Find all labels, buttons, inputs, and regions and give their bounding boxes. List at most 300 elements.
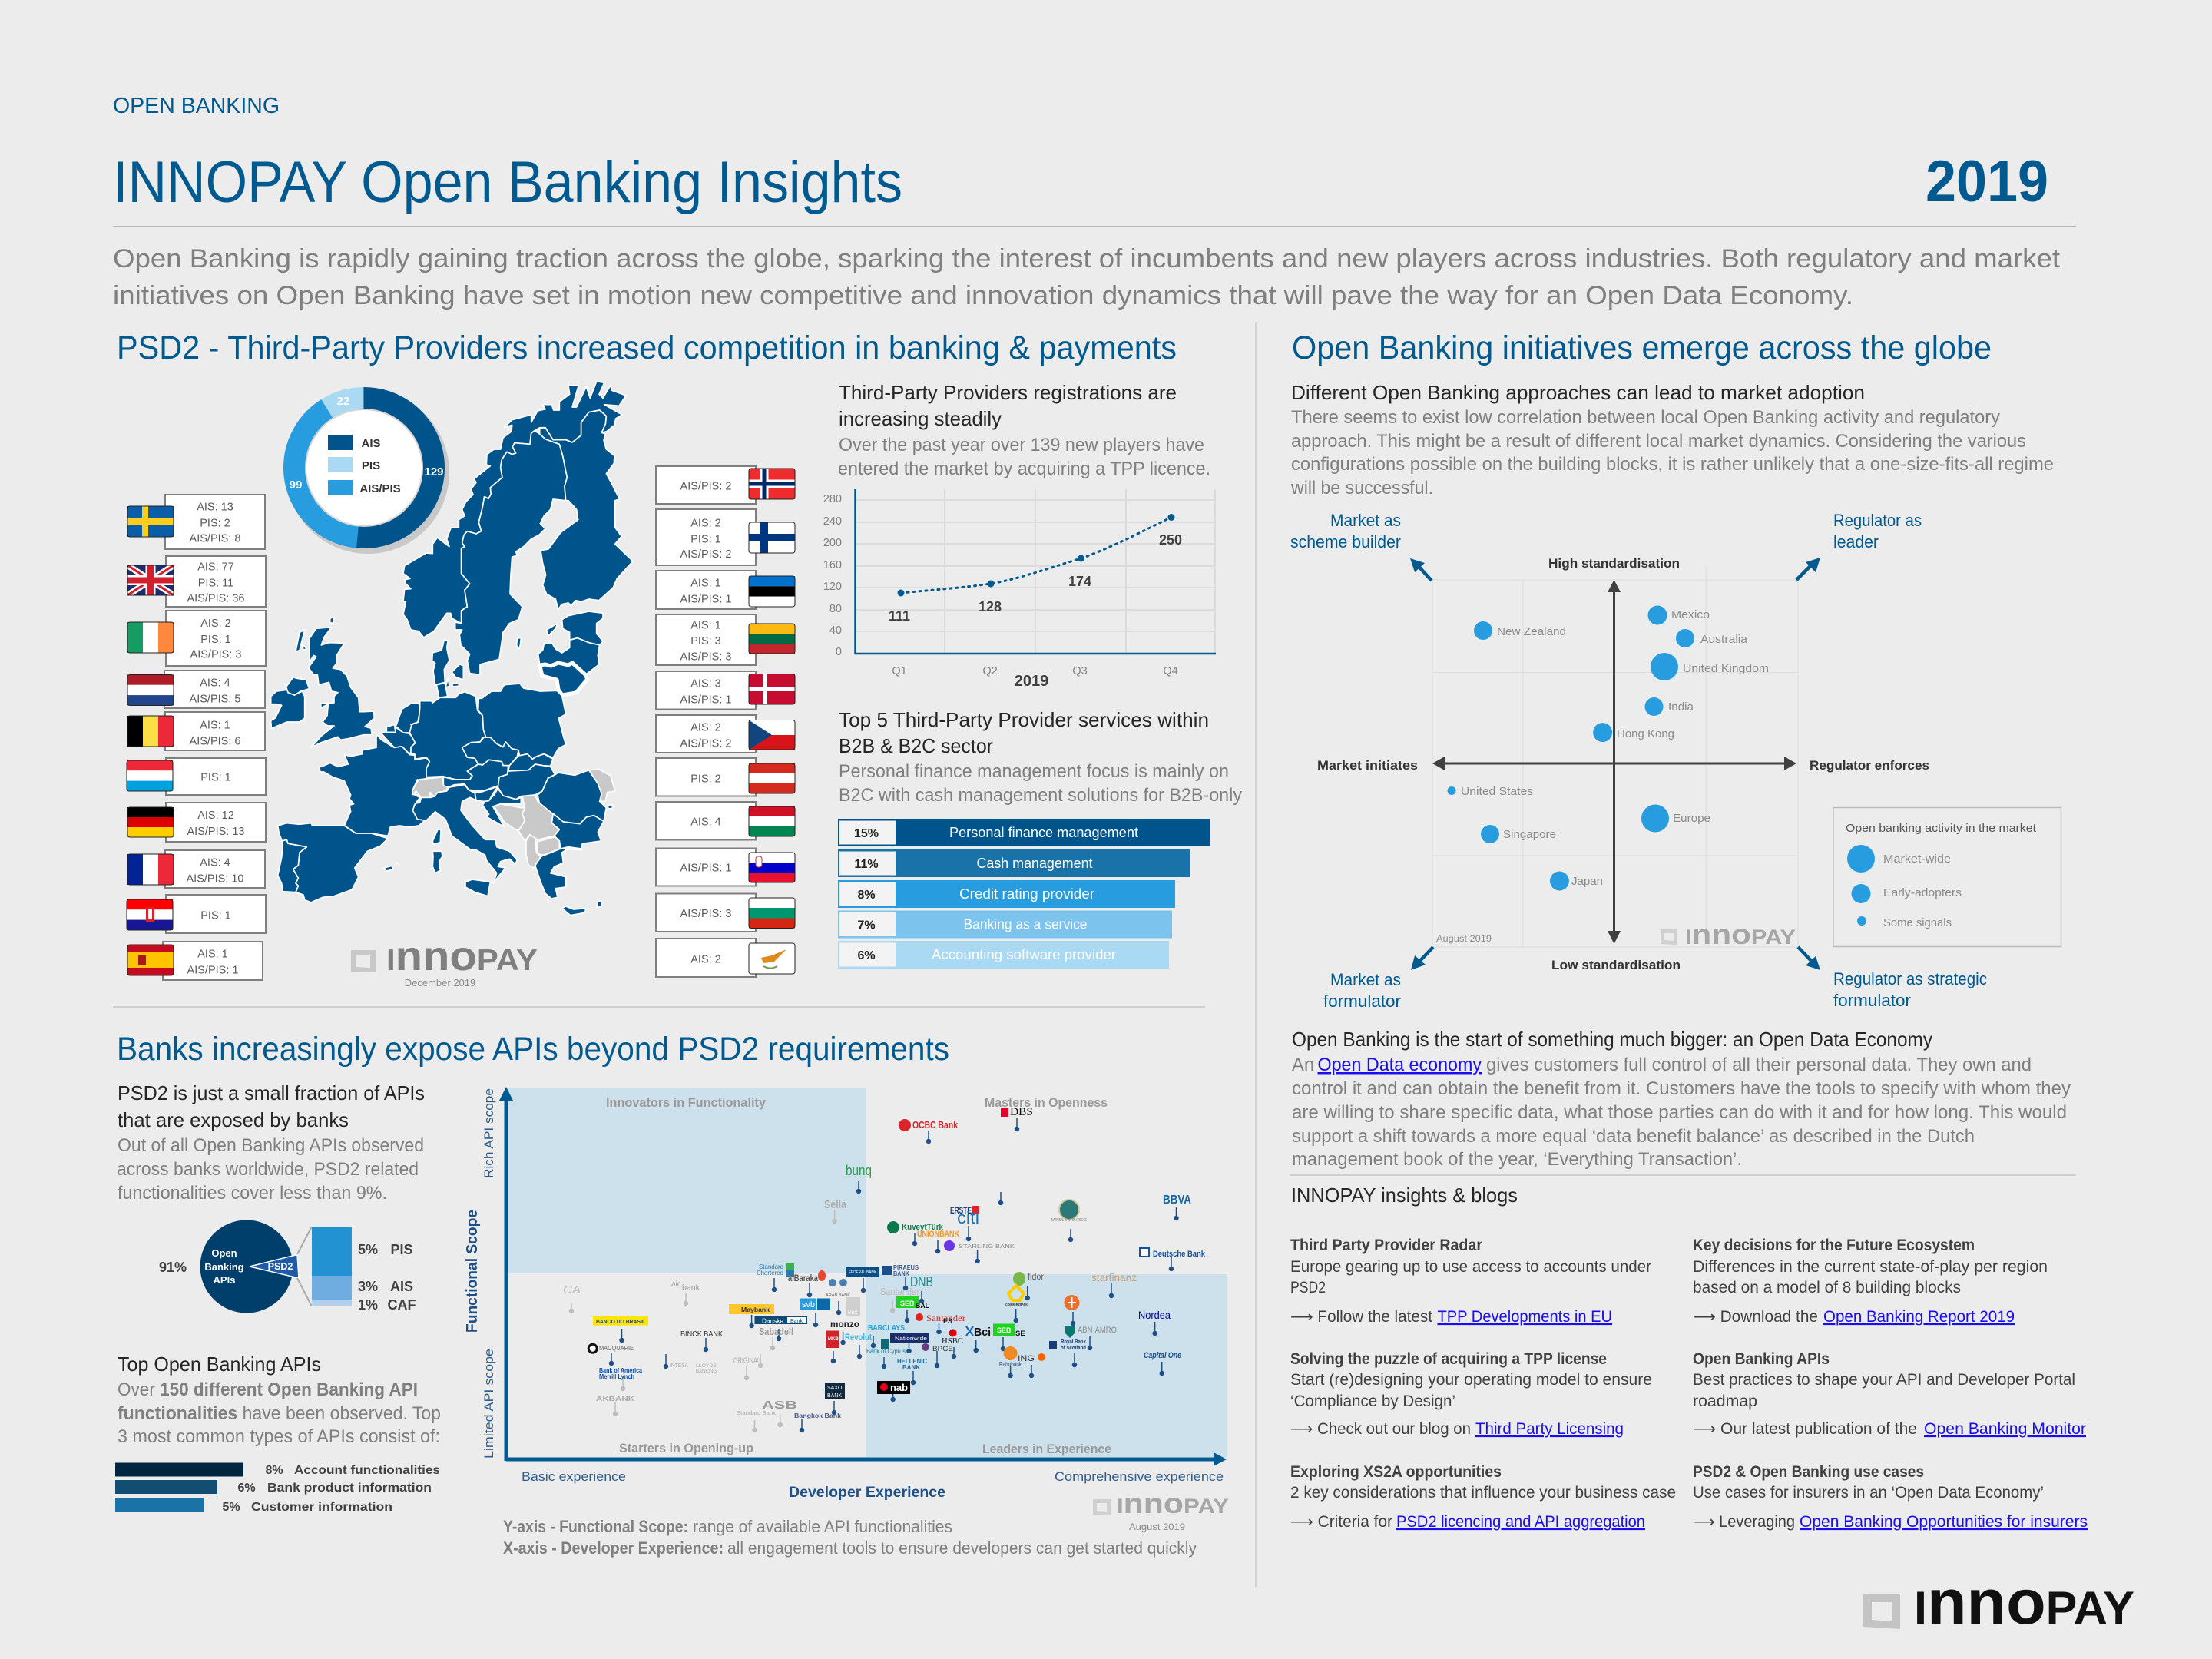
bank logos: PIRAEUS xyxy=(893,1263,919,1271)
bar list: top 5 services xyxy=(838,819,1210,969)
axis labels: Market initiates xyxy=(1317,758,1418,773)
country row: Norway: AIS/PIS: 2 xyxy=(680,481,731,493)
bank logos: of Scotland xyxy=(1061,1344,1086,1351)
heading: PSD2 section: PSD2 - Third-Party Providers increased competition in banking & payments xyxy=(117,329,1177,366)
x axis labels xyxy=(522,1469,1224,1501)
bank logos: Bank of America xyxy=(599,1366,642,1374)
blog: Third Party Provider Radar xyxy=(1290,1237,1651,1326)
country row: Bulgaria xyxy=(656,894,795,932)
country row: United Kingdom: AIS/PIS: 36 xyxy=(187,593,244,605)
bank logos: air xyxy=(671,1280,680,1289)
blog: key decisions xyxy=(1693,1237,2048,1326)
blog: XS2A opportunities: ⟶ Criteria for xyxy=(1290,1513,1392,1531)
country row: Netherlands xyxy=(127,671,265,708)
country row: Belgium: AIS: 1 xyxy=(200,719,230,731)
intro text xyxy=(113,244,2061,310)
bar chart: top API types: 5% xyxy=(222,1501,240,1514)
text: open data economy: gives customers full control of all their personal data. They own and xyxy=(1486,1055,2032,1075)
quadrant labels: Masters in Openness xyxy=(985,1095,1108,1110)
bank logos: Nordea xyxy=(1138,1309,1171,1321)
blog: use cases: Open Banking Opportunities for insurers xyxy=(1800,1513,2088,1531)
bank logos: Rabobank xyxy=(999,1361,1022,1368)
donut chart: AIS PIS AIS/PIS: 129 xyxy=(424,465,444,478)
bank logos: Danske xyxy=(762,1318,784,1324)
country row: Lithuania: AIS/PIS: 3 xyxy=(680,651,731,664)
y axis labels xyxy=(464,1088,496,1459)
country row: Croatia: PIS: 1 xyxy=(200,909,231,922)
text: top 5 TPP services: B2B & B2C sector xyxy=(839,734,993,757)
logo: INNOPAY matrix: Inno PAY xyxy=(1685,919,1796,950)
bank logos: Santander xyxy=(926,1313,965,1323)
bank logos: Bangkok Bank xyxy=(794,1412,841,1419)
line chart: TPP registrations 2019: 120 xyxy=(823,581,842,593)
bank logos: Nationwide xyxy=(895,1336,927,1342)
logo: INNOPAY chart: August 2019 xyxy=(1129,1522,1185,1532)
chart: regulator vs market matrix xyxy=(1290,511,2061,1011)
line chart: TPP registrations 2019: 240 xyxy=(823,515,842,528)
bank logos: DBS xyxy=(1010,1106,1033,1118)
country bubbles: Singapore xyxy=(1503,828,1556,841)
bank logos: Bank xyxy=(790,1319,803,1324)
bank logos: fidor xyxy=(1028,1271,1044,1282)
pie chart: PSD2 share of APIs: CAF xyxy=(387,1297,416,1313)
logo: INNOPAY footer: InnoPAY xyxy=(1914,1566,2134,1637)
line chart: TPP registrations 2019: 2019 xyxy=(1015,673,1048,690)
axis definitions: all engagement tools to ensure developers can get started quickly xyxy=(727,1538,1197,1558)
country row: United Kingdom: PIS: 11 xyxy=(198,578,233,590)
country row: Czech Republic: AIS/PIS: 2 xyxy=(680,737,731,750)
bank logos: CA xyxy=(563,1283,581,1296)
blog: XS2A opportunities: Exploring XS2A opportunities xyxy=(1290,1463,1502,1481)
country bubbles: Mexico xyxy=(1671,608,1710,621)
bank logos: ARAB BANK xyxy=(826,1293,851,1298)
text: top open banking APIs: Top Open Banking APIs xyxy=(118,1353,321,1376)
text: top open banking APIs: functionalities have been observed. Top xyxy=(118,1403,441,1424)
country row: Spain: AIS: 1 xyxy=(197,948,228,960)
blog: open banking APIs: Open Banking APIs xyxy=(1693,1350,1830,1368)
country bubbles: Hong Kong xyxy=(1617,727,1674,740)
blog: open banking APIs xyxy=(1693,1350,2086,1438)
country row: Finland: AIS: 2 xyxy=(690,518,721,530)
bank logos: MACQUARIE xyxy=(599,1345,634,1352)
bar list: top 5 services: 15% xyxy=(854,827,879,840)
pie chart: PSD2 share of APIs: 1% xyxy=(358,1297,378,1313)
country row: United Kingdom: AIS: 77 xyxy=(197,561,234,573)
quadrant: innovators in functionality xyxy=(506,1088,866,1273)
bank logos: ES xyxy=(943,1317,952,1325)
pie chart: PSD2 share of APIs: PSD2 xyxy=(268,1261,293,1272)
country row: Sweden: AIS/PIS: 8 xyxy=(190,533,240,545)
country row: Norway xyxy=(656,466,795,504)
logo: INNOPAY map: InnoPAY xyxy=(386,933,538,979)
country row: Ireland: AIS: 2 xyxy=(200,618,231,630)
bank logos: HSBC xyxy=(942,1336,963,1346)
axis definitions: X-axis - Developer Experience: xyxy=(503,1538,724,1558)
blog: key decisions: Differences in the current state-of-play per region xyxy=(1693,1258,2048,1276)
bank logos: Standard Bank xyxy=(737,1409,776,1416)
bank logos: Standard xyxy=(759,1263,783,1270)
bar list: top 5 services: Personal finance management xyxy=(949,825,1138,840)
blog: use cases: Use cases for insurers in an ‘Open Data Economy’ xyxy=(1693,1484,2044,1502)
pie chart: PSD2 share of APIs: 91% xyxy=(159,1260,187,1275)
donut chart: AIS PIS AIS/PIS: PIS xyxy=(362,459,380,472)
blog: use cases: ⟶ Leveraging xyxy=(1693,1513,1795,1531)
corner labels: formulator xyxy=(1323,992,1401,1011)
blog: use cases xyxy=(1693,1463,2088,1531)
kicker: open banking: OPEN BANKING xyxy=(113,94,280,118)
text: top open banking APIs: 3 most common types of APIs consist of: xyxy=(118,1426,440,1447)
bank logos: BPCE xyxy=(932,1345,953,1353)
chart: bank API quadrant xyxy=(464,1087,1229,1558)
country row: Czech Republic: AIS: 2 xyxy=(690,722,721,734)
y axis labels: Limited API scope xyxy=(482,1349,496,1459)
line chart: TPP registrations 2019: 250 xyxy=(1159,532,1182,548)
country row: Sweden: PIS: 2 xyxy=(200,518,230,530)
blog: use cases: PSD2 & Open Banking use cases xyxy=(1693,1463,1924,1481)
country bubbles xyxy=(1447,605,1769,891)
line chart: TPP registrations 2019: 40 xyxy=(830,624,842,637)
bank logos: MKB xyxy=(828,1337,839,1342)
pie chart: PSD2 share of APIs xyxy=(159,1220,416,1313)
text: open data economy: An xyxy=(1292,1055,1314,1075)
bank logos: Santander xyxy=(880,1286,920,1297)
axes xyxy=(499,1087,1227,1466)
country row: Belgium xyxy=(127,712,265,750)
line chart: TPP registrations 2019: 200 xyxy=(823,537,842,549)
bank logos: BANK xyxy=(902,1364,920,1371)
quadrant labels: Leaders in Experience xyxy=(982,1442,1111,1456)
blog: acquiring a TPP license: ‘Compliance by Design’ xyxy=(1290,1392,1455,1410)
bar chart: top API types: 8% xyxy=(265,1464,283,1477)
pie chart: PSD2 share of APIs: 5% xyxy=(358,1242,378,1257)
corner labels: formulator xyxy=(1833,991,1911,1010)
blog: key decisions: ⟶ Download the xyxy=(1693,1308,1818,1326)
blog: open banking APIs: Open Banking Monitor xyxy=(1924,1420,2086,1438)
x axis labels: Basic experience xyxy=(522,1469,626,1484)
bank logos xyxy=(563,1106,1206,1419)
text: top 5 TPP services xyxy=(839,708,1243,806)
country row: Luxembourg xyxy=(127,758,266,795)
bank logos: ABN·AMRO xyxy=(1078,1326,1117,1335)
text: top 5 TPP services: Personal finance management focus is mainly on xyxy=(839,761,1229,782)
logo: INNOPAY map xyxy=(351,933,538,988)
country row: Slovenia xyxy=(656,848,795,886)
blog: acquiring a TPP license xyxy=(1290,1350,1652,1438)
bar list: top 5 services: Credit rating provider xyxy=(959,886,1094,902)
bar list: top 5 services: Accounting software provider xyxy=(932,947,1116,962)
bank logos: SAXO xyxy=(827,1386,843,1391)
bar chart: top API types xyxy=(115,1462,440,1514)
quadrant labels: Innovators in Functionality xyxy=(606,1095,767,1110)
country row: Lithuania: PIS: 3 xyxy=(690,635,721,647)
line chart: TPP registrations 2019: 160 xyxy=(823,559,842,571)
title: INNOPAY Open Banking Insights xyxy=(113,150,902,215)
country row: Austria xyxy=(656,758,795,796)
line chart: TPP registrations 2019: Q4 xyxy=(1163,665,1178,677)
legend: activity in the market xyxy=(1833,808,2061,946)
logo: INNOPAY chart: Inno PAY xyxy=(1117,1488,1229,1519)
text: TPP registrations: Third-Party Providers registrations are xyxy=(839,381,1177,404)
y axis labels: Rich API scope xyxy=(482,1088,496,1178)
bank logos: OCBC Bank xyxy=(912,1119,959,1131)
corner labels: Market as xyxy=(1330,511,1401,530)
bank logos: SE xyxy=(1015,1330,1025,1338)
text: approaches to adoption: There seems to exist low correlation between local Open Banking activity and regulatory xyxy=(1291,407,2001,428)
country row: Netherlands: AIS/PIS: 5 xyxy=(190,693,240,705)
bank logos: BANK xyxy=(827,1393,842,1399)
axis labels: Low standardisation xyxy=(1551,958,1681,972)
bank logos: monzo xyxy=(830,1319,859,1330)
heading: APIs section: Banks increasingly expose APIs beyond PSD2 requirements xyxy=(117,1031,949,1068)
bank logos: BANCO DO BRASIL xyxy=(596,1320,646,1325)
text: top 5 TPP services: B2C with cash management solutions for B2B-only xyxy=(839,785,1243,806)
year: 2019 xyxy=(1926,149,2048,214)
bank logos: BANKING xyxy=(696,1369,717,1374)
text: open data economy: support a shift towards a more equal ‘data benefit balance’ as described in the Dutch xyxy=(1292,1126,1975,1147)
blog: acquiring a TPP license: Start (re)designing your operating model to ensure xyxy=(1290,1371,1652,1389)
country row: France xyxy=(127,850,265,888)
line chart: TPP registrations 2019: 128 xyxy=(979,599,1002,614)
donut chart: AIS PIS AIS/PIS: 22 xyxy=(337,395,349,408)
bank logos: BBVA xyxy=(1163,1194,1191,1207)
blog: acquiring a TPP license: ⟶ Check out our blog on xyxy=(1290,1420,1471,1438)
corner labels: Regulator as strategic xyxy=(1833,969,1987,988)
bar list: top 5 services: 8% xyxy=(857,889,876,902)
text: approaches to adoption: Different Open Banking approaches can lead to market adoption xyxy=(1291,381,1865,404)
date: August 2019 xyxy=(1436,933,1492,944)
bar chart: top API types: 6% xyxy=(237,1482,256,1495)
pie chart: PSD2 share of APIs: AIS xyxy=(390,1279,413,1294)
country row: Austria: PIS: 2 xyxy=(690,773,721,785)
bank logos: Sella xyxy=(824,1198,847,1211)
country row: Lithuania xyxy=(656,614,795,665)
bank logos: DNB xyxy=(910,1274,933,1290)
blog: acquiring a TPP license: Third Party Licensing xyxy=(1475,1420,1624,1438)
pie chart: PSD2 share of APIs: PIS xyxy=(390,1242,413,1257)
axis definitions: range of available API functionalities xyxy=(693,1517,952,1536)
bank logos: RBC xyxy=(848,1311,858,1316)
text: top 5 TPP services: Top 5 Third-Party Provider services within xyxy=(839,708,1209,731)
text: open data economy: control it and can obtain the benefit from it. Customers have the tools to specify with whom they xyxy=(1292,1078,2071,1099)
bank logos: svb xyxy=(802,1300,815,1310)
bank logos: BANK xyxy=(893,1270,910,1277)
x axis labels: Comprehensive experience xyxy=(1055,1469,1224,1484)
corner labels: Regulator as xyxy=(1833,511,1922,530)
country row: Sweden xyxy=(127,495,265,549)
country row: Denmark xyxy=(656,671,795,710)
line chart: TPP registrations 2019: 0 xyxy=(836,646,842,658)
bank logos: bank xyxy=(682,1283,700,1293)
country row: Sweden: AIS: 13 xyxy=(197,501,233,513)
donut chart: AIS PIS AIS/PIS: AIS xyxy=(361,437,381,450)
country row: Denmark: AIS: 3 xyxy=(690,677,721,690)
pie chart: PSD2 share of APIs: APIs xyxy=(214,1274,235,1286)
legend: activity in the market: Some signals xyxy=(1883,916,1952,929)
legend: activity in the market: Early-adopters xyxy=(1883,886,1962,899)
country row: Hungary xyxy=(656,802,795,840)
blog: acquiring a TPP license: Solving the puzzle of acquiring a TPP license xyxy=(1290,1350,1607,1368)
bank logos: NATIONAL BANK OF GREECE xyxy=(1051,1218,1087,1223)
text: open data economy: are willing to share specific data, what those parties can do with it and for how long. This would xyxy=(1292,1102,2067,1123)
line chart: TPP registrations 2019: 174 xyxy=(1068,574,1091,589)
map of Europe xyxy=(271,382,633,916)
blog: Third Party Provider Radar: Third Party Provider Radar xyxy=(1290,1237,1482,1254)
bank logos: Revolut xyxy=(845,1332,872,1343)
bank logos: Capital One xyxy=(1144,1351,1181,1360)
pie chart: PSD2 share of APIs: Banking xyxy=(204,1261,244,1273)
line chart: TPP registrations 2019: 280 xyxy=(823,493,842,505)
blog: Third Party Provider Radar: Europe gearing up to use access to accounts under xyxy=(1290,1258,1651,1276)
bank logos: LLOYDS xyxy=(696,1364,717,1369)
country row: Ireland: AIS/PIS: 3 xyxy=(190,648,241,661)
quadrant labels xyxy=(606,1095,1111,1456)
blog: open banking APIs: roadmap xyxy=(1693,1392,1757,1410)
bank logos: Bci xyxy=(974,1326,991,1339)
text: approaches to adoption: configurations possible on the building blocks, it is rather unlikely that a one-size-fits-all regime xyxy=(1291,454,2054,475)
country bubbles: Australia xyxy=(1700,633,1748,646)
bank logos: ASB xyxy=(762,1399,797,1412)
text: open data economy: management book of the year, ‘Everything Transaction’. xyxy=(1292,1149,1742,1170)
corner arrows xyxy=(1410,558,1820,970)
country bubbles: Japan xyxy=(1571,875,1603,888)
text: top open banking APIs: Over 150 different Open Banking API xyxy=(118,1379,418,1400)
axis labels: Regulator enforces xyxy=(1810,758,1929,773)
matrix axes xyxy=(1432,580,1796,944)
text: PSD2 fraction: across banks worldwide, PSD2 related xyxy=(117,1159,419,1180)
line chart: TPP registrations 2019 xyxy=(823,489,1216,690)
bank logos: Sabadell xyxy=(759,1326,793,1337)
pie chart: PSD2 share of APIs: Open xyxy=(211,1247,237,1259)
corner labels: leader xyxy=(1833,532,1879,551)
country bubbles: Europe xyxy=(1673,812,1710,825)
legend: activity in the market: Market-wide xyxy=(1883,853,1951,866)
blog: XS2A opportunities: 2 key considerations that influence your business case xyxy=(1290,1484,1676,1502)
intro text: initiatives on Open Banking have set in motion new competitive and innovation dynamics that will pave the way for an Open Data Economy. xyxy=(113,281,1853,310)
blog: key decisions: Key decisions for the Future Ecosystem xyxy=(1693,1237,1975,1254)
bank logos: Deutsche Bank xyxy=(1153,1250,1206,1259)
bank logos: BAL xyxy=(916,1302,929,1310)
bank logos: Chartered xyxy=(757,1269,783,1277)
text: PSD2 fraction: that are exposed by banks xyxy=(118,1108,349,1131)
country row: Estonia: AIS: 1 xyxy=(690,578,721,590)
bank logos: alBaraka xyxy=(788,1273,818,1283)
bank logos: ING xyxy=(1018,1354,1035,1363)
country row: Finland: PIS: 1 xyxy=(690,533,721,545)
country bubbles: New Zealand xyxy=(1497,625,1566,638)
donut chart: AIS PIS AIS/PIS xyxy=(286,391,449,554)
country row: Finland: AIS/PIS: 2 xyxy=(680,548,731,561)
bar chart: top API types: Customer information xyxy=(251,1501,392,1514)
blog: XS2A opportunities xyxy=(1290,1463,1676,1531)
country row: Ireland xyxy=(127,611,266,666)
blog: Third Party Provider Radar: ⟶ Follow the latest xyxy=(1290,1308,1432,1326)
bar list: top 5 services: Banking as a service xyxy=(963,917,1088,932)
text: TPP registrations: increasing steadily xyxy=(839,407,1002,430)
legend: activity in the market: Open banking activity in the market xyxy=(1846,822,2037,835)
bank logos: SEB xyxy=(997,1326,1012,1334)
bank logos: Royal Bank xyxy=(1061,1338,1087,1345)
text: open data economy: Open Data economy xyxy=(1318,1055,1482,1075)
bank logos: BINCK BANK xyxy=(680,1330,723,1339)
country row: Slovenia: AIS/PIS: 1 xyxy=(680,862,731,874)
bank logos: starfinanz xyxy=(1091,1271,1137,1283)
country row: Hungary: AIS: 4 xyxy=(690,816,721,828)
country row: Finland xyxy=(656,509,795,565)
intro text: Open Banking is rapidly gaining traction across the globe, sparking the interest of incumbents and new players across industries. Both regulatory and market xyxy=(113,244,2061,273)
blog: XS2A opportunities: PSD2 licencing and API aggregation xyxy=(1396,1513,1645,1531)
text: TPP registrations xyxy=(838,381,1210,479)
country row: Germany: AIS: 12 xyxy=(197,810,234,822)
logo: INNOPAY map: December 2019 xyxy=(405,977,475,988)
text: approaches to adoption: will be successful. xyxy=(1290,478,1433,498)
bank logos: Bank of Cyprus xyxy=(866,1348,906,1355)
bank logos: Merrill Lynch xyxy=(599,1373,634,1380)
country row: Czech Republic xyxy=(656,715,795,753)
text: open data economy: Open Banking is the start of something much bigger: an Open Data Economy xyxy=(1292,1028,1932,1051)
bank logos: nab xyxy=(890,1382,908,1393)
axis definitions xyxy=(503,1517,1197,1558)
bar chart: top API types: Account functionalities xyxy=(294,1464,440,1477)
country row: Denmark: AIS/PIS: 1 xyxy=(680,694,731,707)
bank logos: INTESA xyxy=(670,1363,688,1369)
bar list: top 5 services: 11% xyxy=(854,858,879,871)
line chart: TPP registrations 2019: Q3 xyxy=(1072,665,1088,677)
bank logos: Maybank xyxy=(741,1306,770,1313)
axis labels xyxy=(1317,556,1929,972)
donut chart: AIS PIS AIS/PIS: AIS/PIS xyxy=(359,482,401,495)
axis definitions: Y-axis - Functional Scope: xyxy=(503,1517,688,1536)
country row: Ireland: PIS: 1 xyxy=(200,634,231,646)
blog: Third Party Provider Radar: PSD2 xyxy=(1290,1279,1326,1296)
country row: Cyprus xyxy=(656,939,795,977)
text: PSD2 fraction: Out of all Open Banking APIs observed xyxy=(118,1135,424,1156)
text: PSD2 fraction xyxy=(117,1081,425,1204)
bank logos: bunq xyxy=(846,1163,872,1178)
bar list: top 5 services: 6% xyxy=(857,949,876,962)
country row: United Kingdom xyxy=(127,556,266,607)
blog: open banking APIs: Best practices to shape your API and Developer Portal xyxy=(1693,1371,2075,1389)
text: TPP registrations: entered the market by acquiring a TPP licence. xyxy=(838,459,1210,479)
text: PSD2 fraction: functionalities cover less than 9%. xyxy=(118,1183,387,1204)
country row: Belgium: AIS/PIS: 6 xyxy=(190,736,240,748)
bank logos: HELLENIC xyxy=(897,1358,927,1365)
y axis labels: Functional Scope xyxy=(464,1210,481,1333)
bank pins xyxy=(571,1118,1177,1430)
country row: Lithuania: AIS: 1 xyxy=(690,619,721,631)
bar list: top 5 services: Cash management xyxy=(977,856,1092,871)
bar list: top 5 services: 7% xyxy=(857,919,876,932)
x axis labels: Developer Experience xyxy=(789,1485,945,1501)
country bubbles: United States xyxy=(1461,785,1533,798)
text: top open banking APIs xyxy=(118,1353,441,1447)
country row: Estonia: AIS/PIS: 1 xyxy=(680,593,731,605)
line chart: TPP registrations 2019: 111 xyxy=(889,608,910,624)
quadrant labels: Starters in Opening-up xyxy=(619,1441,753,1455)
bank logos: FEDERAL BANK xyxy=(849,1270,876,1275)
corner labels: scheme builder xyxy=(1290,532,1401,551)
text: open data economy xyxy=(1292,1028,2071,1170)
blog: Third Party Provider Radar: TPP Developments in EU xyxy=(1438,1308,1612,1326)
text: TPP registrations: Over the past year over 139 new players have xyxy=(839,435,1204,455)
text: approaches to adoption xyxy=(1290,381,2054,498)
bank logos: AKBANK xyxy=(596,1396,634,1402)
quadrant: leaders in experience xyxy=(866,1274,1227,1457)
bar chart: top API types: Bank product information xyxy=(267,1482,432,1495)
bank logos: STARLING BANK xyxy=(959,1243,1015,1250)
bank logos: SEB xyxy=(900,1300,915,1307)
country row: Germany xyxy=(127,803,266,842)
heading: initiatives section: Open Banking initiatives emerge across the globe xyxy=(1292,329,1992,366)
